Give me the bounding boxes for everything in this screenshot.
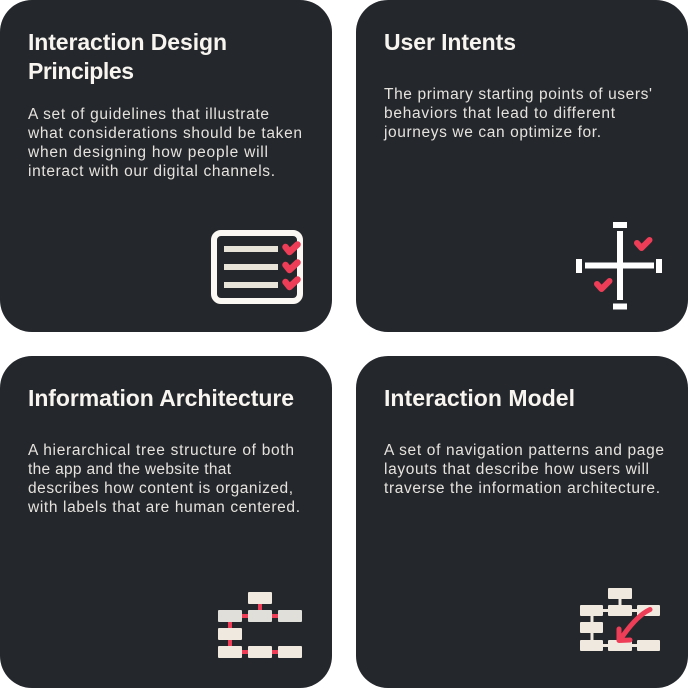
panel: user intents [356,0,688,332]
icon: crosshair with checks [576,222,662,310]
text: interaction model description: A set of navigation patterns and page [384,442,664,459]
text: information architecture description [27,442,300,516]
text: information architecture description: A hierarchical tree structure of both [28,442,294,459]
heading: interaction design principles [28,29,227,84]
text: information architecture description: describes how content is organized, [28,480,293,497]
text: principles description: when designing how people will [27,144,268,161]
heading: interaction design principles: Principles [28,58,134,84]
text: user intents description [383,86,652,141]
heading: interaction design principles: Interaction Design [28,29,227,55]
text: principles description [27,106,302,180]
text: interaction model description: traverse the information architecture. [384,480,660,497]
text: principles description: what considerations should be taken [27,125,302,142]
panel: information architecture [0,356,332,688]
text: user intents description: journeys we can optimize for. [383,124,601,141]
icon: sitemap with arrow [580,588,660,651]
icon: sitemap tree [218,592,302,658]
heading: interaction model: Interaction Model [384,385,575,411]
heading: user intents: User Intents [384,29,516,55]
text: principles description: interact with our digital channels. [28,163,275,180]
icon: checklist [214,233,300,301]
text: user intents description: behaviors that lead to different [384,105,616,122]
text: principles description: A set of guidelines that illustrate [28,106,269,123]
panel: interaction design principles [0,0,332,332]
text: user intents description: The primary starting points of users' [384,86,652,103]
text: information architecture description: with labels that are human centered. [27,499,300,516]
text: information architecture description: the app and the website that [28,461,232,478]
panel: interaction model [356,356,688,688]
text: interaction model description: layouts that describe how users will [384,461,649,478]
heading: information architecture: Information Architecture [28,385,294,411]
text: interaction model description [384,442,664,497]
